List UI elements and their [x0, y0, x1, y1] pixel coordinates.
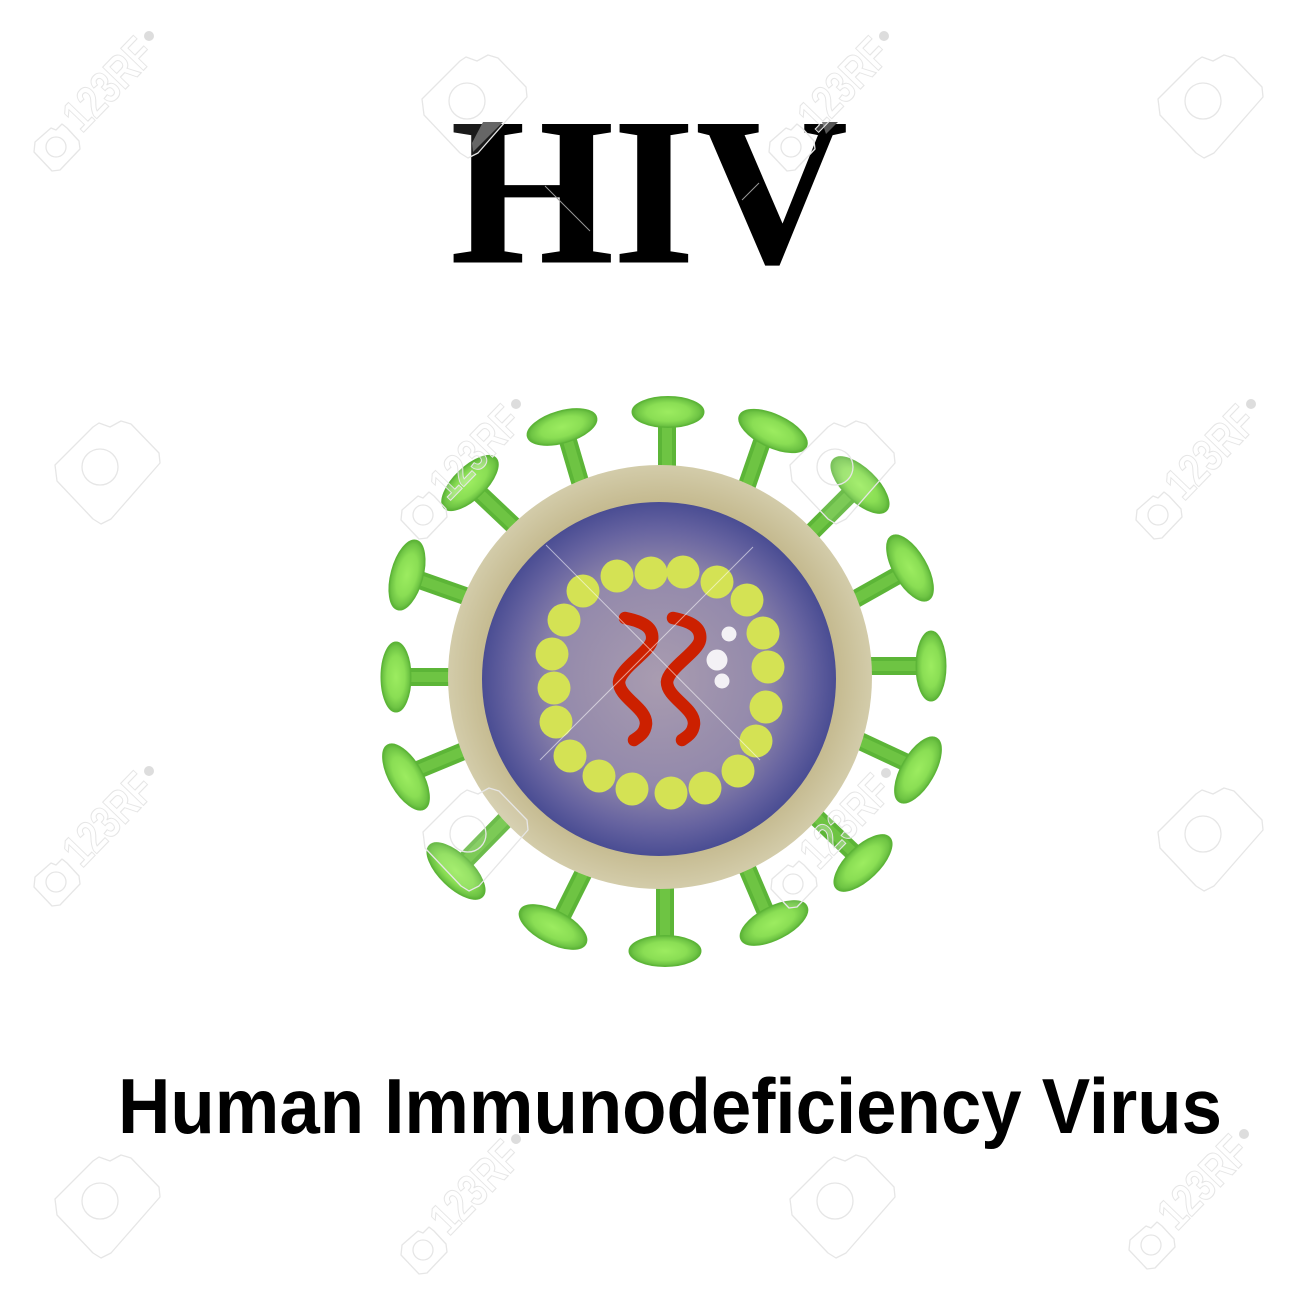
watermark: 123RF row 4: [55, 1125, 1259, 1274]
watermark: 123RF row 2: 123RF: [1154, 395, 1266, 509]
watermark: 123RF row 4: 123RF: [1147, 1125, 1259, 1239]
watermark: 123RF row 2: [55, 395, 1266, 539]
watermark: 123RF row 4: 123RF: [419, 1130, 531, 1244]
watermark: 123RF row 1: 123RF: [787, 27, 899, 141]
watermark lines across capsid: [540, 545, 760, 760]
title: HIV: [450, 76, 848, 308]
watermark: 123RF row 1: [34, 27, 1263, 171]
RNA strands: [619, 618, 700, 740]
watermark: 123RF row 3: 123RF: [789, 764, 901, 878]
ring of yellow capsid proteins: [536, 556, 784, 810]
spike stems: [402, 420, 925, 945]
white enzyme dots: [706, 626, 736, 688]
watermark: 123RF row 2: 123RF: [419, 395, 531, 509]
capsid interior: [482, 502, 836, 856]
subtitle: Human Immunodeficiency Virus: [118, 1062, 1222, 1150]
watermark: 123RF row 1: 123RF: [52, 27, 164, 141]
spike heads: [373, 396, 951, 966]
virus illustration: [373, 396, 951, 966]
watermark: 123RF row 3: 123RF: [52, 762, 164, 876]
membrane: [448, 465, 872, 889]
watermark: 123RF row 3: [34, 762, 1263, 908]
